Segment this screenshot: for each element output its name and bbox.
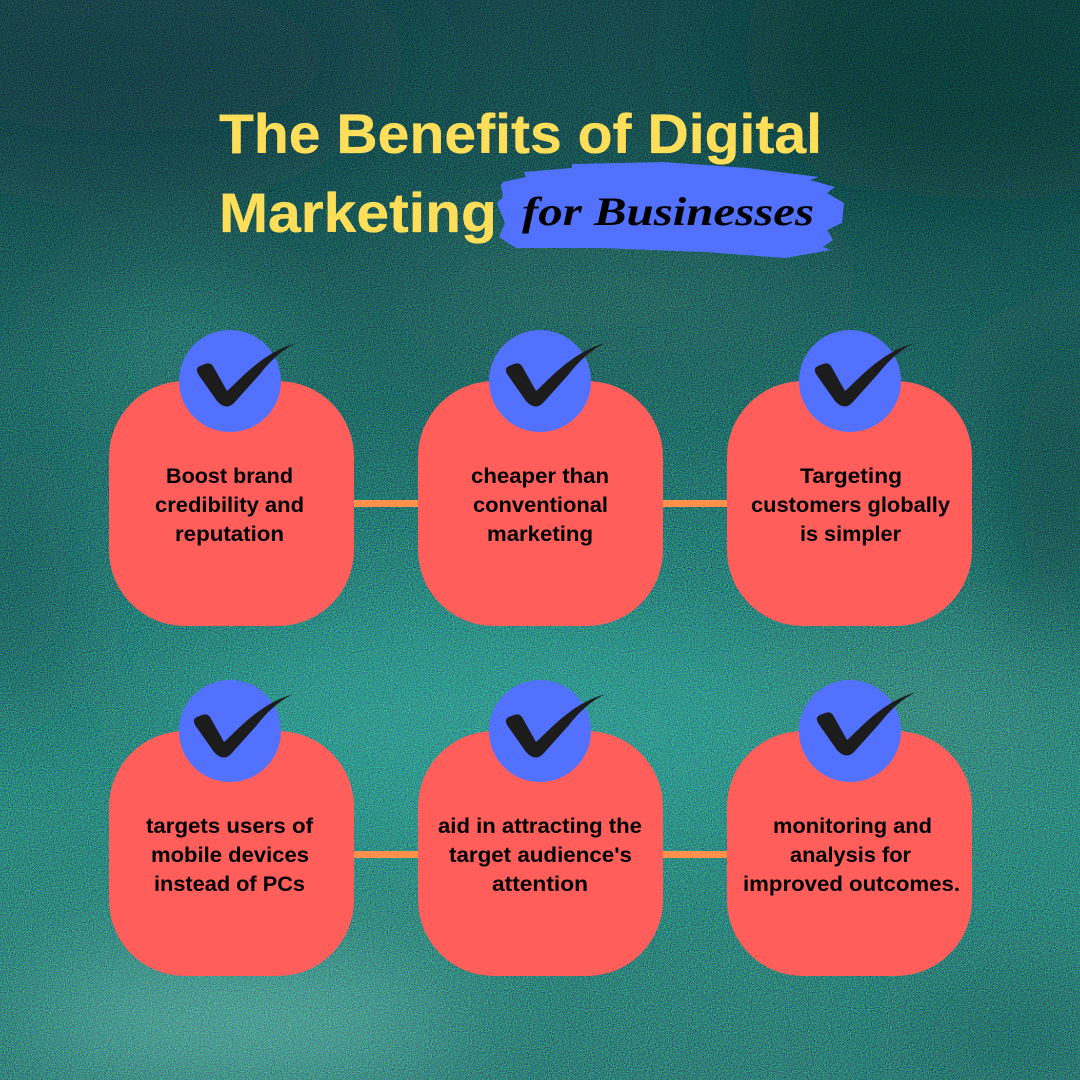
text [743, 814, 960, 896]
text: mobile devices [151, 843, 309, 867]
title: The Benefits of Digital [219, 102, 822, 165]
text: instead of PCs [154, 872, 305, 896]
icon: check badge 2 [489, 330, 606, 432]
text [146, 814, 314, 896]
card 3 [727, 330, 972, 626]
text: analysis for [790, 843, 912, 867]
text: customers globally [751, 493, 950, 517]
text: attention [492, 872, 588, 896]
title [219, 102, 822, 244]
card 4 [109, 680, 354, 976]
text [471, 464, 609, 546]
text: monitoring and [773, 814, 932, 838]
text: marketing [487, 522, 593, 546]
card 5 [418, 680, 663, 976]
text: credibility and [155, 493, 304, 517]
icon: check badge 6 [799, 680, 917, 782]
brush highlight with script subtitle: for Businesses [522, 189, 814, 234]
title: Marketing [219, 181, 497, 244]
text: aid in attracting the [438, 814, 642, 838]
icon: check badge 5 [489, 680, 606, 782]
text: Targeting [800, 464, 902, 488]
text: conventional [473, 493, 608, 517]
text: Boost brand [166, 464, 293, 488]
connectors between cards [353, 500, 728, 858]
text [751, 464, 950, 546]
icon: check badge 4 [179, 680, 294, 782]
brush highlight with script subtitle [497, 162, 844, 258]
card 1 [109, 330, 354, 626]
icon: check badge 1 [179, 330, 297, 432]
icon: check badge 3 [799, 330, 915, 432]
text: reputation [175, 522, 284, 546]
card 2 [418, 330, 663, 626]
text: is simpler [800, 522, 902, 546]
text [155, 464, 304, 546]
text: targets users of [146, 814, 314, 838]
text: improved outcomes. [743, 872, 960, 896]
text: cheaper than [471, 464, 609, 488]
card 6 [727, 680, 972, 976]
text [438, 814, 642, 896]
text: target audience's [449, 843, 632, 867]
